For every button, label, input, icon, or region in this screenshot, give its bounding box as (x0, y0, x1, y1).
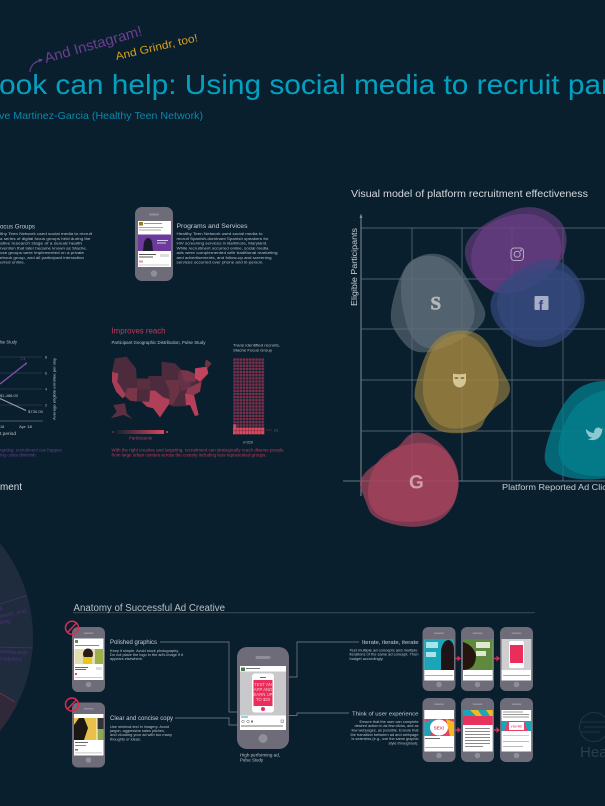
panel: focus groups: a series of digital focus groups held during the (0, 236, 90, 241)
reach takeaway: With the right creative and targeting, recruitment can strategically reach diverse people (112, 448, 284, 452)
wheel diagram: media and (0, 649, 27, 656)
line chart: cost and enrollment: $730.00 (28, 410, 43, 414)
phone: high-performing ad: EARN UP (253, 692, 273, 697)
waffle chart: trans identified recruits: n=229 (243, 440, 253, 444)
caption: high-performing ad: Pulse Study (240, 758, 264, 762)
text: think of user experience: desired action in as few clicks, and as (354, 723, 419, 728)
icon: Instagram (511, 248, 524, 260)
panel: focus groups: ebook group, and all participant interaction (0, 255, 84, 260)
panel: programs and services: recruit Spanish-dominant Spanish speakers for (176, 236, 269, 241)
line chart: cost and enrollment: 18 (0, 425, 4, 429)
heading: anatomy of successful ad creative: Anatomy of Successful Ad Creative (74, 603, 225, 614)
waffle chart: trans identified recruits: Stache Focus Group (233, 348, 272, 352)
phone: high-performing ad (237, 647, 289, 749)
caption: high-performing ad: High performing ad, (240, 752, 280, 758)
wheel diagram (0, 544, 33, 731)
panel: focus groups: urred online. (0, 260, 25, 264)
phone: high-performing ad: TEST AN (254, 682, 272, 687)
blob: Stache (391, 254, 485, 352)
map legend (112, 430, 168, 440)
waffle chart: trans identified recruits (233, 342, 280, 444)
line chart: cost and enrollment: 7.3 (20, 357, 25, 361)
text: clear and concise copy: and clouding your ad with too many (110, 732, 172, 737)
panel: programs and services: HIV screening services in Baltimore, Maryland. (176, 240, 268, 246)
logo: Healthy Teen Network (580, 712, 605, 761)
icon: Facebook: f (538, 297, 544, 313)
text: clear and concise copy: thoughts or ideas. (110, 736, 141, 741)
waffle chart: trans identified recruits: Trans identified recruits, (233, 342, 280, 348)
chart: visual model of platform effectiveness (343, 207, 605, 527)
line chart: cost and enrollment: Average eligible enrollee per day (52, 358, 56, 420)
text: polished graphics: Do not place the logo in the ad's image if it (110, 652, 184, 657)
phone row: user experience examples: YOU'RE (511, 724, 522, 728)
icon: Stache: S (430, 294, 441, 314)
panel: programs and services: ads were complemented with traditional marketing (176, 250, 278, 255)
phone: clear copy example (72, 702, 105, 768)
text: polished graphics: Polished graphics (110, 640, 157, 646)
title: ook can help: Using social media to recruit par (0, 69, 605, 100)
choropleth map of participants (111, 357, 212, 419)
text: think of user experience: is seamless (e.g., use the same graphic (352, 736, 419, 741)
text: iterate: iterations of the same ad concept. Then (350, 652, 418, 657)
icon: Google: G (409, 472, 424, 494)
panel: programs and services: While recruitment occurred online, social media (176, 245, 269, 250)
text: polished graphics (110, 640, 184, 661)
annotation: And Instagram: And Instagram! (43, 24, 144, 67)
text: clear and concise copy: Clear and concise copy (110, 716, 173, 722)
heading: improves reach: Improves reach (112, 326, 166, 336)
icon: Facebook (534, 296, 548, 313)
line chart: cost and enrollment: rgeting, recruitment can happen (0, 448, 63, 452)
heading: visual model: Visual model of platform recruitment effectiveness (351, 189, 588, 200)
text: think of user experience: Think of user experience (352, 712, 418, 718)
line chart: cost and enrollment: $1,488.00 (0, 394, 18, 398)
panel: focus groups: ocus Groups (0, 224, 35, 230)
phone: high-performing ad: APP AND (254, 687, 272, 692)
panel: focus groups (0, 224, 93, 264)
panel: programs and services: Programs and Services (176, 223, 248, 230)
text: think of user experience: style throughout). (388, 740, 418, 745)
line chart: cost and enrollment: 4 (45, 388, 47, 392)
heading: ment: ment (0, 482, 22, 493)
blob: Twitter (545, 381, 605, 479)
phone row: user experience examples: SEX! (434, 726, 445, 730)
wheel diagram: nalytics (0, 656, 23, 663)
reach takeaway: from large urban centers across the country including less represented groups. (112, 452, 266, 458)
text: polished graphics: appears elsewhere. (110, 656, 143, 661)
phone row: iterate examples (422, 627, 533, 691)
text: iterate: Iterate, iterate, iterate (362, 640, 418, 646)
phone row: user experience examples (422, 698, 533, 762)
blob: Instagram (465, 207, 567, 294)
text: think of user experience: few webpages, as possible. Ensure that (352, 728, 419, 732)
text: clear and concise copy (109, 716, 173, 741)
text: think of user experience (350, 712, 419, 745)
authors: ve Martinez-Garcia (Healthy Teen Network) (0, 110, 203, 122)
panel: programs and services: services occurred over phone and in-person. (176, 260, 264, 264)
annotation: And Grindr: And Grindr, too! (114, 32, 199, 63)
icon: Grindr (453, 374, 466, 388)
icon: phone with Facebook ad (135, 207, 173, 281)
text: think of user experience: the transition between ad and webpage (350, 732, 418, 737)
reach takeaway (112, 448, 284, 458)
panel: focus groups: ative research stage of a sexual health (0, 240, 82, 246)
line chart: cost and enrollment: 6 (45, 372, 47, 376)
icon: no sign 1 (66, 621, 78, 634)
map legend: Participants (129, 436, 152, 440)
text: clear and concise copy: Use minimal text in imagery. Avoid (110, 724, 169, 729)
phone: high-performing ad: TO $20 (256, 697, 271, 702)
icon: Twitter (586, 428, 603, 440)
panel: programs and services: and advertisements, and follow-up and screening (176, 255, 272, 260)
connector lines (160, 642, 359, 725)
chart: visual model of platform effectiveness: Platform Reported Ad Clicks (502, 482, 605, 492)
blob: Google (360, 433, 459, 527)
panel: focus groups: ose groups were implemented on a private (0, 250, 84, 255)
blob: Facebook (490, 259, 585, 347)
text: iterate: budget accordingly. (350, 656, 384, 661)
blob: Grindr (415, 330, 510, 433)
text: polished graphics: Keep it simple. Avoid stock photography. (110, 648, 179, 653)
phone: polished graphics example (72, 627, 105, 692)
caption: high-performing ad (240, 752, 280, 762)
text: iterate: Test multiple ad concepts and multiple (350, 648, 418, 652)
map caption: Participant Geographic Distribution, Pulse Study (112, 340, 206, 345)
panel: focus groups: rvention that later became known as Stache. (0, 245, 87, 250)
panel: programs and services (176, 223, 278, 264)
text: think of user experience: Ensure that the user can complete (360, 719, 418, 724)
line chart: cost and enrollment: Apr 18 (19, 425, 32, 429)
panel: programs and services: Healthy Teen Network used social media to (176, 231, 262, 236)
chart: visual model of platform effectiveness: Eligible Participants (349, 228, 359, 306)
line chart: cost and enrollment: t period (0, 431, 17, 436)
line chart: cost and enrollment: 2 (45, 404, 47, 408)
line chart: cost and enrollment: lse Study (0, 340, 18, 344)
waffle chart: trans identified recruits: 23 (274, 428, 278, 432)
line chart: cost and enrollment: ing costs diminish. (0, 452, 37, 458)
panel: focus groups: lthy Teen Network used social media to recruit (0, 231, 93, 236)
icon: no sign 2 (66, 698, 78, 711)
text: iterate (350, 640, 418, 661)
line chart: cost and enrollment (0, 340, 63, 458)
text: clear and concise copy: jargon, aggressive sales pitches, (109, 728, 165, 733)
line chart: cost and enrollment: 8 (45, 356, 47, 360)
